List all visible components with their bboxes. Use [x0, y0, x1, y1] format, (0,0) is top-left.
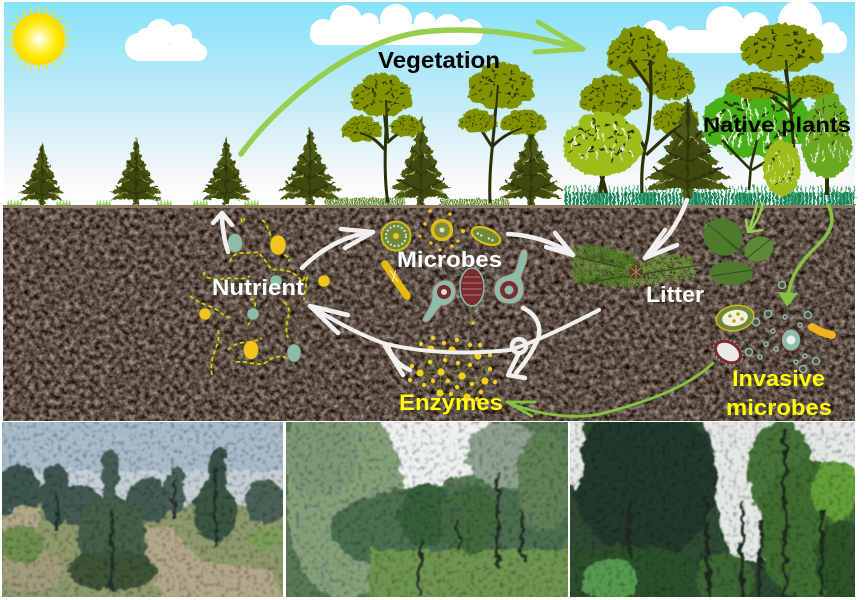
microbe: green oval [469, 223, 503, 249]
litter: pine branch [572, 252, 700, 282]
invasive: teal core [782, 329, 800, 351]
tree: left olive [342, 73, 423, 203]
tree: top right olive [727, 23, 835, 172]
photo: mature mixed forest [570, 422, 855, 597]
label: Enzymes: Enzymes [399, 390, 503, 415]
microbe: yellow rod [385, 264, 407, 296]
label: Nutrient: Nutrient [212, 275, 305, 300]
arrow: vegetation growth [241, 22, 583, 154]
microbes group [382, 209, 528, 325]
microbe: red oval [460, 268, 484, 325]
small pine row [20, 116, 564, 205]
arrow: litter to nutrient [310, 306, 599, 352]
invasive: olive oval [714, 302, 756, 334]
arrow: native plants to invasive microbes [778, 205, 832, 307]
icon: cloud right [642, 0, 847, 53]
arrow: hook to enzymes [385, 346, 410, 375]
invasive web [752, 305, 815, 372]
invasive microbes group [708, 282, 832, 372]
tree: middle olive [459, 62, 546, 203]
tree: tall olive [580, 26, 699, 193]
panel: sky [4, 2, 855, 207]
nutrient strings [190, 218, 307, 375]
tree: light green [564, 111, 643, 193]
arrow: nutrient to microbes [302, 229, 373, 268]
photo: mixed pine stand [286, 422, 568, 597]
panel: soil [3, 205, 855, 421]
tree: big pine [644, 94, 732, 198]
tree: small light green [763, 140, 801, 196]
label: Native plants: Native plants [703, 114, 851, 137]
microbe: round green [382, 222, 410, 250]
arrow: invasive microbes to enzymes [507, 363, 713, 416]
microbe: teal teardrop right [494, 249, 528, 304]
invasive: yellow pill [812, 327, 832, 335]
label: Microbes: Microbes [397, 247, 502, 272]
icon: sun [4, 4, 74, 74]
litter: leaves [697, 211, 778, 285]
invasive: small rings [746, 282, 820, 372]
label: Litter: Litter [646, 282, 704, 307]
microbe: yellow ring [418, 209, 465, 252]
arrow: native plants to leaves [746, 203, 763, 232]
nutrient particles [199, 234, 330, 362]
arrow: litter loop to enzymes [508, 308, 539, 378]
tree: bright green willow [703, 78, 811, 190]
label: Invasive microbes [726, 366, 832, 420]
microbe: teal teardrop left [423, 280, 456, 322]
label: Invasive microbes: microbes [726, 395, 832, 420]
nutrient group [190, 218, 330, 375]
label: Invasive microbes: Invasive [732, 366, 825, 391]
enzymes cluster [408, 336, 497, 401]
arrow: microbes to litter [508, 233, 573, 255]
tree: right green [802, 91, 852, 195]
arrow: nutrient to pine [213, 213, 232, 252]
label: Vegetation: Vegetation [378, 47, 500, 73]
invasive: red rim oval [708, 334, 748, 370]
grass [7, 196, 855, 206]
icon: cloud left [125, 19, 207, 61]
photo: young pine stand [2, 422, 283, 597]
icon: cloud middle [310, 4, 483, 45]
arrow: vegetation to litter [645, 200, 687, 258]
